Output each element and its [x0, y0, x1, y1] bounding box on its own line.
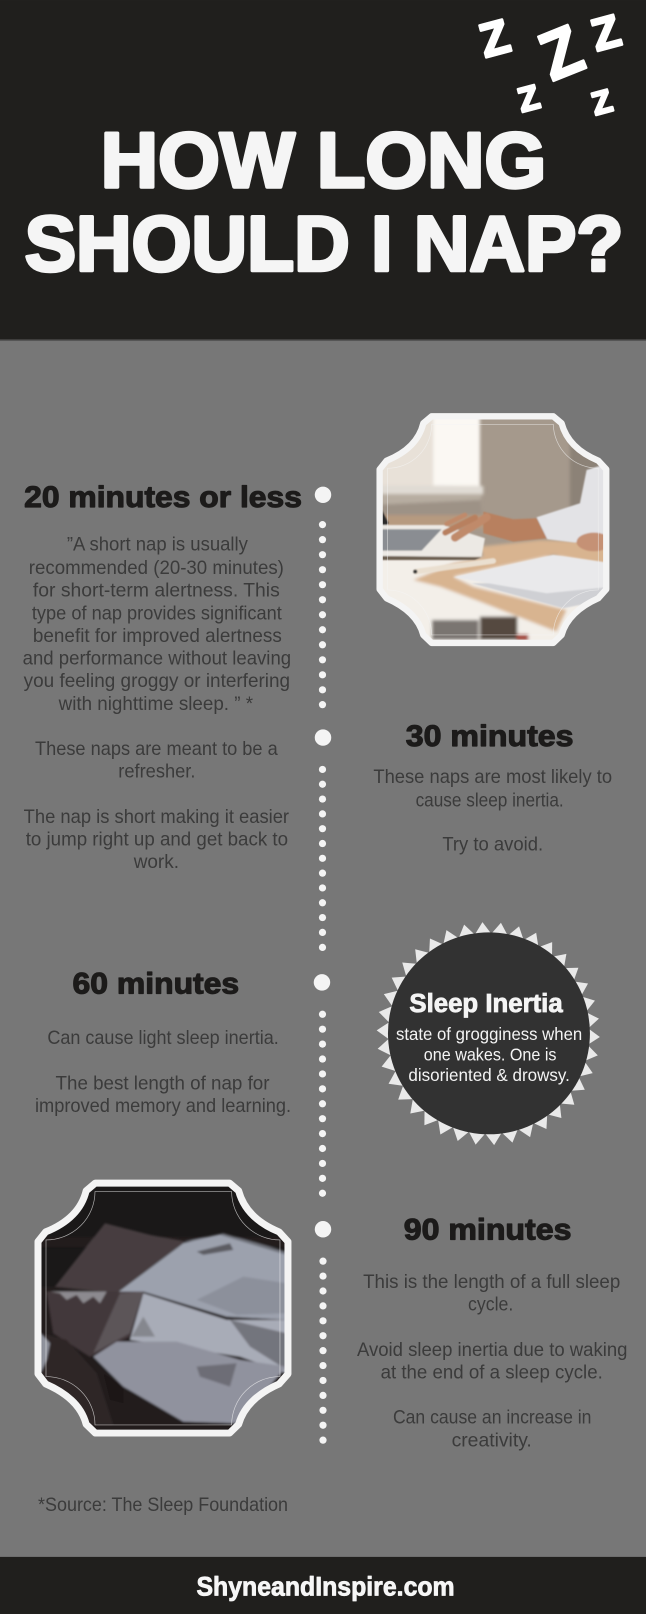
- icon: sleeping Z letters: [474, 5, 626, 122]
- text: 20 minutes description: benefit for improved alertness: [33, 626, 282, 647]
- icon: sleeping Z letters: Z: [588, 82, 616, 122]
- text: 20 minutes description: type of nap provides significant: [32, 603, 282, 624]
- text: 20 minutes description: recommended (20-30 minutes): [29, 558, 284, 579]
- callout: sleep inertia badge: [376, 922, 600, 1146]
- text: 20 minutes description: to jump right up and get back to: [26, 830, 288, 851]
- heading: 30 minutes: 30 minutes: [406, 720, 573, 753]
- text: 20 minutes description: [23, 534, 291, 873]
- text: 90 minutes description: creativity.: [452, 1430, 532, 1451]
- icon: sleeping Z letters: Z: [474, 10, 516, 68]
- text: 20 minutes description: work.: [133, 852, 179, 873]
- text: 90 minutes description: cycle.: [468, 1295, 513, 1316]
- text: 30 minutes description: Try to avoid.: [442, 835, 543, 856]
- photo frame: hands on laptop: [373, 410, 613, 650]
- timeline dots: [314, 487, 331, 1444]
- icon: sleeping Z letters: Z: [514, 78, 544, 120]
- title: SHOULD I NAP?: [25, 200, 623, 288]
- heading: 20 minutes or less: 20 minutes or less: [24, 481, 302, 514]
- heading: 90 minutes: 90 minutes: [404, 1214, 571, 1247]
- callout: sleep inertia badge: disoriented & drowsy.: [408, 1065, 570, 1085]
- icon: sleeping Z letters: Z: [586, 5, 626, 61]
- text: 60 minutes description: [35, 1028, 291, 1117]
- callout: sleep inertia badge: Sleep Inertia: [409, 990, 563, 1018]
- title: [25, 116, 623, 288]
- text: 90 minutes description: Can cause an increase in: [393, 1408, 591, 1429]
- text: 90 minutes description: [357, 1272, 627, 1451]
- text: 20 minutes description: and performance without leaving: [23, 649, 291, 670]
- text: 60 minutes description: improved memory and learning.: [35, 1096, 291, 1117]
- text: 90 minutes description: Avoid sleep inertia due to waking: [357, 1340, 627, 1361]
- callout: sleep inertia badge: state of grogginess when: [396, 1024, 582, 1044]
- text: 20 minutes description: refresher.: [118, 762, 195, 783]
- text: 20 minutes description: These naps are meant to be a: [35, 739, 278, 760]
- title: HOW LONG: [101, 116, 546, 204]
- text: 20 minutes description: you feeling groggy or interfering: [24, 671, 290, 692]
- text: 60 minutes description: The best length of nap for: [56, 1073, 270, 1094]
- text: 30 minutes description: [373, 767, 612, 856]
- text: 20 minutes description: for short-term alertness. This: [33, 581, 280, 602]
- heading: 60 minutes: 60 minutes: [73, 968, 239, 1001]
- source note: *Source: The Sleep Foundation: [38, 1495, 288, 1516]
- text: 30 minutes description: These naps are most likely to: [373, 767, 612, 788]
- text: 20 minutes description: The nap is short making it easier: [24, 807, 290, 828]
- photo frame: rumpled bed sheets: [33, 1177, 293, 1440]
- text: 90 minutes description: This is the length of a full sleep: [363, 1272, 620, 1293]
- header band: [0, 0, 646, 341]
- text: 20 minutes description: ”A short nap is usually: [67, 534, 248, 555]
- callout: sleep inertia badge: one wakes. One is: [424, 1045, 557, 1065]
- footer band: [0, 1557, 646, 1614]
- text: 20 minutes description: with nighttime sleep. ” *: [58, 694, 254, 715]
- footer band: ShyneandInspire.com: [196, 1571, 455, 1601]
- text: 30 minutes description: cause sleep inertia.: [416, 790, 564, 811]
- text: 60 minutes description: Can cause light sleep inertia.: [47, 1028, 279, 1049]
- icon: sleeping Z letters: Z: [529, 11, 594, 96]
- text: 90 minutes description: at the end of a sleep cycle.: [381, 1362, 603, 1383]
